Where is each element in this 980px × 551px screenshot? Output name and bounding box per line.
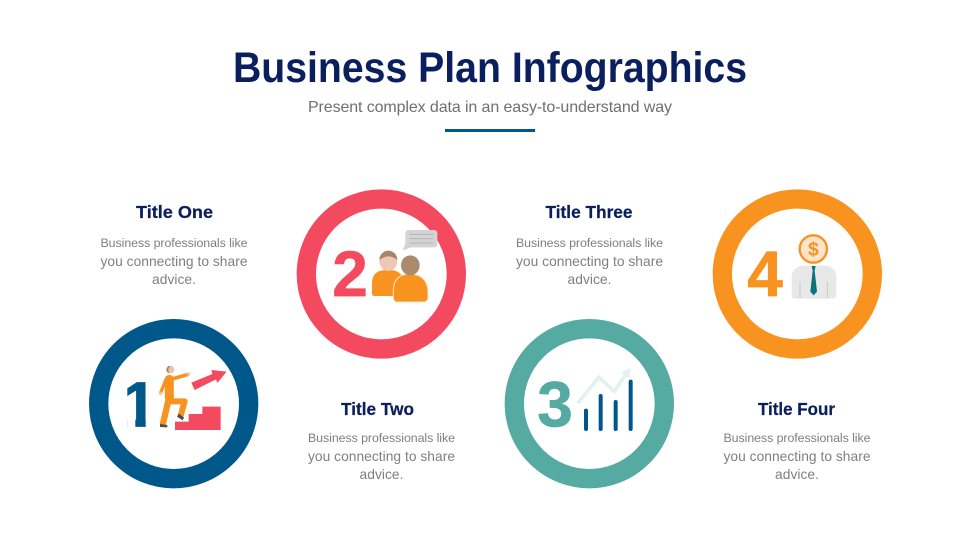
text block: title three: Title Three [546,202,633,222]
text block: title two [308,399,455,482]
text block: title one [100,202,248,287]
subtitle: Present complex data in an easy-to-understand way [308,99,672,116]
text block: title four: you connecting to share [724,449,871,464]
icon: rising bar chart with arrow [578,367,631,429]
text block: title two: you connecting to share [308,449,455,464]
text block: title four: advice. [775,467,819,482]
heading underline [445,129,535,132]
text block: title two: Business professionals like [308,431,455,445]
text block: title four [724,399,871,482]
title: Business Plan Infographics [233,44,747,92]
number 3: 3 [537,369,573,441]
text block: title two: Title Two [341,399,414,419]
text block: title one: advice. [152,272,196,287]
icon: person climbing stairs to arrow [159,366,227,430]
panel: step 4 ring [722,199,872,349]
icon: two people talking with speech bubble [372,230,437,302]
text block: title one: you connecting to share [100,254,248,269]
text block: title one: Title One [136,202,213,222]
number 1 [127,382,146,427]
panel: step 3 ring [514,329,664,479]
number 2: 2 [332,238,368,310]
text block: title three: you connecting to share [516,254,663,269]
text block: title three: Business professionals like [516,236,663,250]
text block: title one: Business professionals like [100,236,248,250]
text block: title three: advice. [568,272,612,287]
text block: title four: Title Four [758,399,835,419]
number 4: 4 [747,238,783,310]
icon: businessman with dollar head [792,235,836,299]
text block: title two: advice. [360,467,404,482]
number 1: 1 [122,369,157,441]
panel: step 2 ring [306,199,456,349]
text block: title four: Business professionals like [724,431,871,445]
panel: step 1 ring [99,329,249,479]
text block: title three [516,202,663,287]
icon: businessman with dollar head: $ [808,240,819,261]
